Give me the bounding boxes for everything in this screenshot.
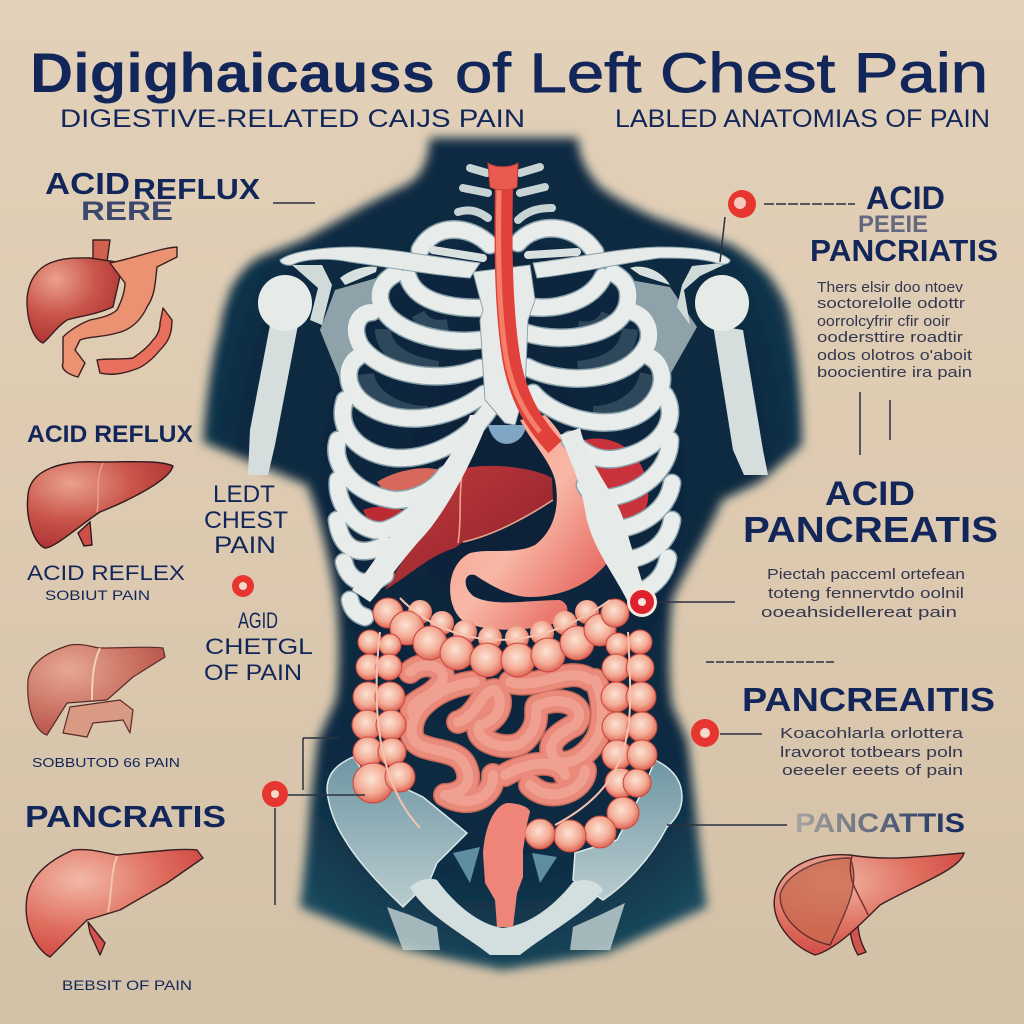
- icon: liver 3: [28, 645, 165, 737]
- gallbladder region: [488, 425, 526, 444]
- left costal cartilage: [352, 415, 490, 602]
- right ilium: [573, 760, 682, 900]
- upper ribs near neck: [433, 167, 577, 258]
- left label: pancratis: PANCRATIS: [25, 799, 226, 834]
- liver: [385, 466, 553, 590]
- left humerus: [248, 275, 312, 475]
- marker: right lower: [691, 719, 762, 747]
- acromion left: [292, 265, 332, 325]
- descending colon: [601, 630, 657, 798]
- right heading: acid pancreatis middle: ACID: [825, 475, 915, 513]
- marker: left chest: [232, 575, 254, 597]
- left caption: bottom: BEBSIT OF PAIN: [62, 977, 192, 993]
- left label: left chest pain: CHEST: [204, 507, 288, 534]
- right paragraph upper: oorrolcyfrir cfir ooir: [817, 313, 950, 330]
- torso silhouette: [203, 138, 802, 970]
- left label: acid chest of pain: AGID: [238, 608, 278, 633]
- icon: liver and stomach with pancreas: [27, 240, 177, 377]
- marker: lower rib: [627, 587, 735, 617]
- right paragraph upper: soctorelolle odottr: [817, 295, 965, 312]
- gray lung shading: [366, 314, 648, 414]
- right scapula: [630, 280, 697, 387]
- icon: pancreas liver right: [774, 853, 964, 955]
- right heading: acid pancreatis upper: PANCRIATIS: [810, 233, 998, 268]
- right paragraph lower: Koacohlarla orlottera: [780, 725, 964, 742]
- left label: acid reflux top: [45, 166, 261, 226]
- right paragraph lower: [780, 725, 964, 779]
- small intestine: [410, 665, 602, 801]
- right paragraph upper: odos olotros o'aboit: [817, 347, 973, 364]
- spleen: [578, 439, 648, 522]
- stomach and duodenum: [450, 415, 609, 630]
- icon: liver 2: [27, 462, 173, 548]
- left caption: sobbutod: SOBBUTOD 66 PAIN: [32, 755, 180, 770]
- left label: acid reflux top: RERE: [81, 196, 173, 226]
- lower left ramus: [387, 907, 440, 950]
- right heading: acid pancreatis upper: PEEIE: [858, 211, 928, 238]
- transverse colon front row: [373, 598, 629, 677]
- title: of Left Chest Pain: [455, 41, 988, 104]
- left label: acid chest of pain: CHETGL: [205, 634, 313, 659]
- rectum: [483, 803, 530, 927]
- connector and marker: lower left: [262, 738, 365, 905]
- taenia lines: [377, 598, 630, 828]
- esophagus: [488, 163, 555, 447]
- left label: acid chest of pain: OF PAIN: [204, 660, 302, 685]
- left label: acid reflex: ACID REFLEX: [27, 562, 185, 585]
- right heading: acid pancreatis middle: PANCREATIS: [743, 509, 998, 550]
- left scapula: [320, 277, 380, 387]
- ascending colon: [352, 630, 415, 803]
- ribs: [337, 228, 672, 617]
- transverse colon back row: [408, 600, 599, 650]
- left label: acid reflux top: REFLUX: [133, 174, 261, 206]
- right paragraph middle: toteng fennervtdo oolnil: [768, 585, 964, 602]
- right costal cartilage: [560, 428, 648, 602]
- pubic arch: [410, 879, 603, 955]
- sacrum wings: [453, 847, 557, 883]
- right paragraph middle: [761, 566, 965, 621]
- left ilium: [327, 757, 467, 907]
- red tissue behind left ribs: [358, 468, 440, 555]
- right heading: acid pancreatis upper: ACID: [866, 180, 945, 216]
- marker: upper right: [720, 190, 855, 262]
- large intestine: [352, 598, 657, 927]
- left label: acid reflux 2: ACID REFLUX: [27, 421, 193, 448]
- left label: left chest pain: LEDT: [213, 481, 275, 508]
- pelvis: [327, 757, 682, 955]
- subtitle right: LABLED ANATOMIAS OF PAIN: [615, 105, 990, 133]
- right humerus: [695, 275, 768, 475]
- left label: left chest pain: PAIN: [214, 532, 276, 559]
- right paragraph upper: Thers elsir doo ntoev: [817, 279, 964, 296]
- sigmoid colon: [525, 797, 639, 852]
- lower right ramus: [570, 903, 625, 950]
- right heading: acid pancreatis upper: [810, 180, 998, 268]
- right paragraph upper: boocientire ira pain: [817, 364, 972, 381]
- right label: faded pancatis: PANCATTIS: [795, 808, 965, 838]
- coracoid: [340, 267, 670, 285]
- left label: acid reflux top: ACID: [45, 166, 130, 201]
- right paragraph upper: oodersttire roadtir: [817, 329, 963, 346]
- sternum: [473, 265, 535, 425]
- right paragraph lower: oeeeler eeets of pain: [782, 762, 963, 779]
- right clavicle: [533, 247, 730, 278]
- left label: left chest pain: [204, 481, 288, 559]
- acromion right: [677, 262, 730, 325]
- right heading: pancreaitis: PANCREAITIS: [742, 681, 995, 718]
- left clavicle: [280, 247, 480, 278]
- right paragraph middle: ooeahsidellereat pain: [761, 604, 957, 621]
- right paragraph lower: lravorot totbears poln: [780, 744, 963, 761]
- title: [30, 41, 988, 104]
- subtitle left: DIGESTIVE-RELATED CAIJS PAIN: [60, 105, 525, 133]
- skeleton: [248, 167, 768, 617]
- title: Digighaicauss: [30, 41, 435, 104]
- right heading: acid pancreatis middle: [743, 475, 998, 550]
- right paragraph middle: Piectah pacceml ortefean: [767, 566, 965, 583]
- left caption: sobiut pain: SOBIUT PAIN: [45, 587, 150, 603]
- left label: acid chest of pain: [204, 608, 313, 685]
- right paragraph upper: [817, 279, 973, 381]
- icon: liver 4: [26, 849, 203, 957]
